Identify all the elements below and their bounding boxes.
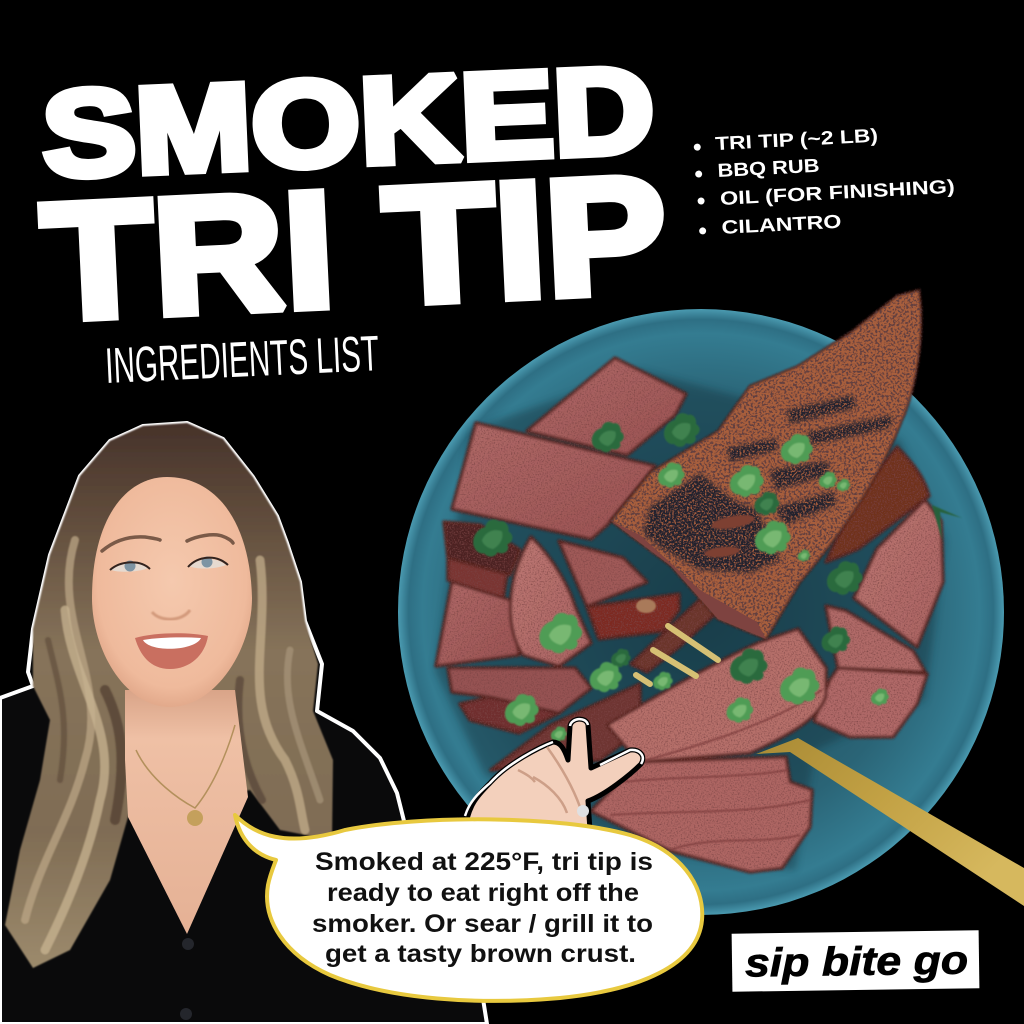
cilantro leaves <box>473 413 962 742</box>
gold fork handle <box>756 738 1024 906</box>
logo: sip bite go: sip bite go <box>745 938 968 986</box>
ingredient: bbq rub: BBQ RUB <box>717 156 820 182</box>
bubble text: ready to eat right off the <box>327 879 639 907</box>
woman presenter <box>0 423 487 1024</box>
shadow under meat <box>435 370 945 870</box>
bubble text: smoker. Or sear / grill it to <box>312 910 653 938</box>
teal plate <box>398 309 1004 915</box>
small crust piece highlight <box>636 599 656 613</box>
ingredient bullet list <box>693 122 957 240</box>
smile <box>135 633 208 669</box>
necklace pendant <box>136 725 235 826</box>
meat slices <box>436 358 943 872</box>
white cutout outline and shirt <box>0 423 487 1024</box>
eyes <box>110 556 228 572</box>
title line: tri tip: TRI TIP <box>38 141 670 354</box>
shirt buttons <box>180 938 194 1020</box>
bubble text: get a tasty brown crust. <box>325 940 636 968</box>
ingredient: bbq rub <box>695 156 820 183</box>
title line: smoked: SMOKED <box>40 41 657 203</box>
ingredient: cilantro <box>699 212 842 240</box>
charred grill marks <box>643 395 893 573</box>
ingredient: oil: OIL (FOR FINISHING) <box>719 177 955 210</box>
subtitle: ingredients list: INGREDIENTS LIST <box>104 325 380 394</box>
hair <box>5 423 333 968</box>
hair highlights <box>25 540 320 950</box>
logo: sip bite go <box>732 930 979 992</box>
big seared tri tip roast <box>611 290 921 639</box>
neck and chest <box>125 690 248 934</box>
plate of sliced tri tip <box>398 290 1024 915</box>
ingredient: oil <box>697 177 955 211</box>
title: Smoked Tri Tip <box>38 41 670 354</box>
slice grain lines <box>600 690 822 850</box>
nose <box>152 610 190 619</box>
underside edge <box>611 521 766 639</box>
face <box>92 477 252 707</box>
browned spots inside char <box>704 512 756 559</box>
ingredient: cilantro: CILANTRO <box>721 212 842 239</box>
fork tines <box>636 626 718 684</box>
finger shading <box>518 747 580 813</box>
speech bubble callout <box>235 815 702 1001</box>
ingredient: tri tip <box>693 126 878 156</box>
hand silhouette <box>465 719 643 830</box>
eyebrows <box>102 535 233 551</box>
bubble text: Smoked at 225°F, tri tip is <box>315 848 653 876</box>
hand gesture <box>465 719 643 830</box>
bubble text <box>312 848 653 968</box>
white rim <box>465 719 643 816</box>
ingredient: tri tip: TRI TIP (~2 LB) <box>715 126 878 155</box>
ring <box>577 805 589 817</box>
